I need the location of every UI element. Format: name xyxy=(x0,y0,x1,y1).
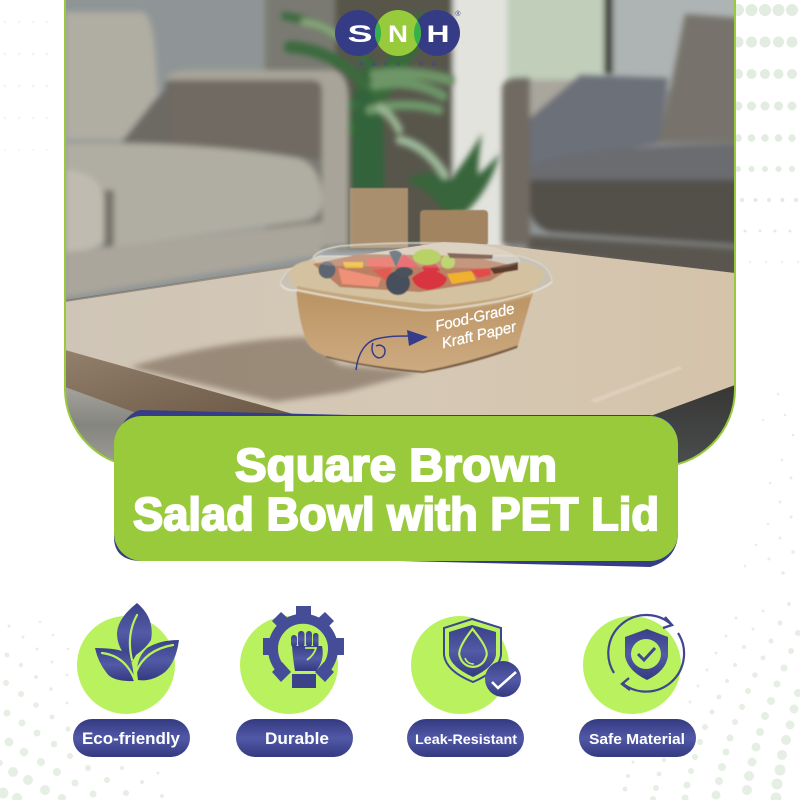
lid dome xyxy=(313,243,520,268)
label pill: Eco-friendly xyxy=(82,730,181,748)
arrow to kraft paper xyxy=(356,330,428,370)
title text: Salad Bowl with PET Lid xyxy=(133,488,659,540)
logo: SNH Packing: ® xyxy=(455,10,461,18)
logo: SNH Packing: H xyxy=(426,21,450,48)
logo: SNH Packing: N xyxy=(388,21,408,48)
label pill: Durable xyxy=(265,730,329,748)
hero photo: bowl on table in living room xyxy=(65,0,743,470)
bottom-right dots xyxy=(622,393,800,800)
callout: food-grade kraft paper: Food-Grade xyxy=(434,300,516,335)
curtain and window xyxy=(265,0,743,250)
table xyxy=(65,242,735,418)
title banner xyxy=(114,410,678,567)
logo: SNH Packing: S xyxy=(348,21,372,48)
logo: SNH Packing xyxy=(335,10,461,68)
feature: safe material xyxy=(579,615,696,757)
icon: gear and fist xyxy=(263,606,344,688)
bowl shadow xyxy=(130,337,420,402)
label pill xyxy=(407,719,524,757)
right sofa xyxy=(502,14,740,280)
floor under table xyxy=(66,388,134,460)
background dot pattern xyxy=(5,10,800,262)
title text xyxy=(133,439,659,540)
bowl xyxy=(280,243,552,373)
label pill xyxy=(579,719,696,757)
feature: durable xyxy=(236,606,353,757)
title text: Square Brown xyxy=(235,439,557,491)
bowl body xyxy=(296,285,533,371)
icon: shield with cycle arrows xyxy=(608,615,684,692)
icon: leaves xyxy=(95,603,179,681)
label pill xyxy=(236,719,353,757)
paper rim xyxy=(289,260,545,307)
lid flange xyxy=(280,255,553,292)
callout: food-grade kraft paper xyxy=(436,304,516,348)
logo: SNH Packing: PACKING xyxy=(360,62,436,68)
fruit xyxy=(313,254,515,292)
callout: food-grade kraft paper: Kraft Paper xyxy=(440,318,519,352)
plants and pots xyxy=(285,16,500,213)
label pill: Safe Material xyxy=(589,732,685,748)
feature: eco-friendly xyxy=(73,603,190,757)
feature: leak-resistant xyxy=(407,616,524,757)
label pill xyxy=(73,719,190,757)
lid skirt xyxy=(281,282,552,310)
left sofa xyxy=(65,12,349,297)
label pill: Leak-Resistant xyxy=(415,731,517,747)
icon: shield with drop and check xyxy=(444,619,521,697)
bottom-left dots xyxy=(0,621,164,800)
